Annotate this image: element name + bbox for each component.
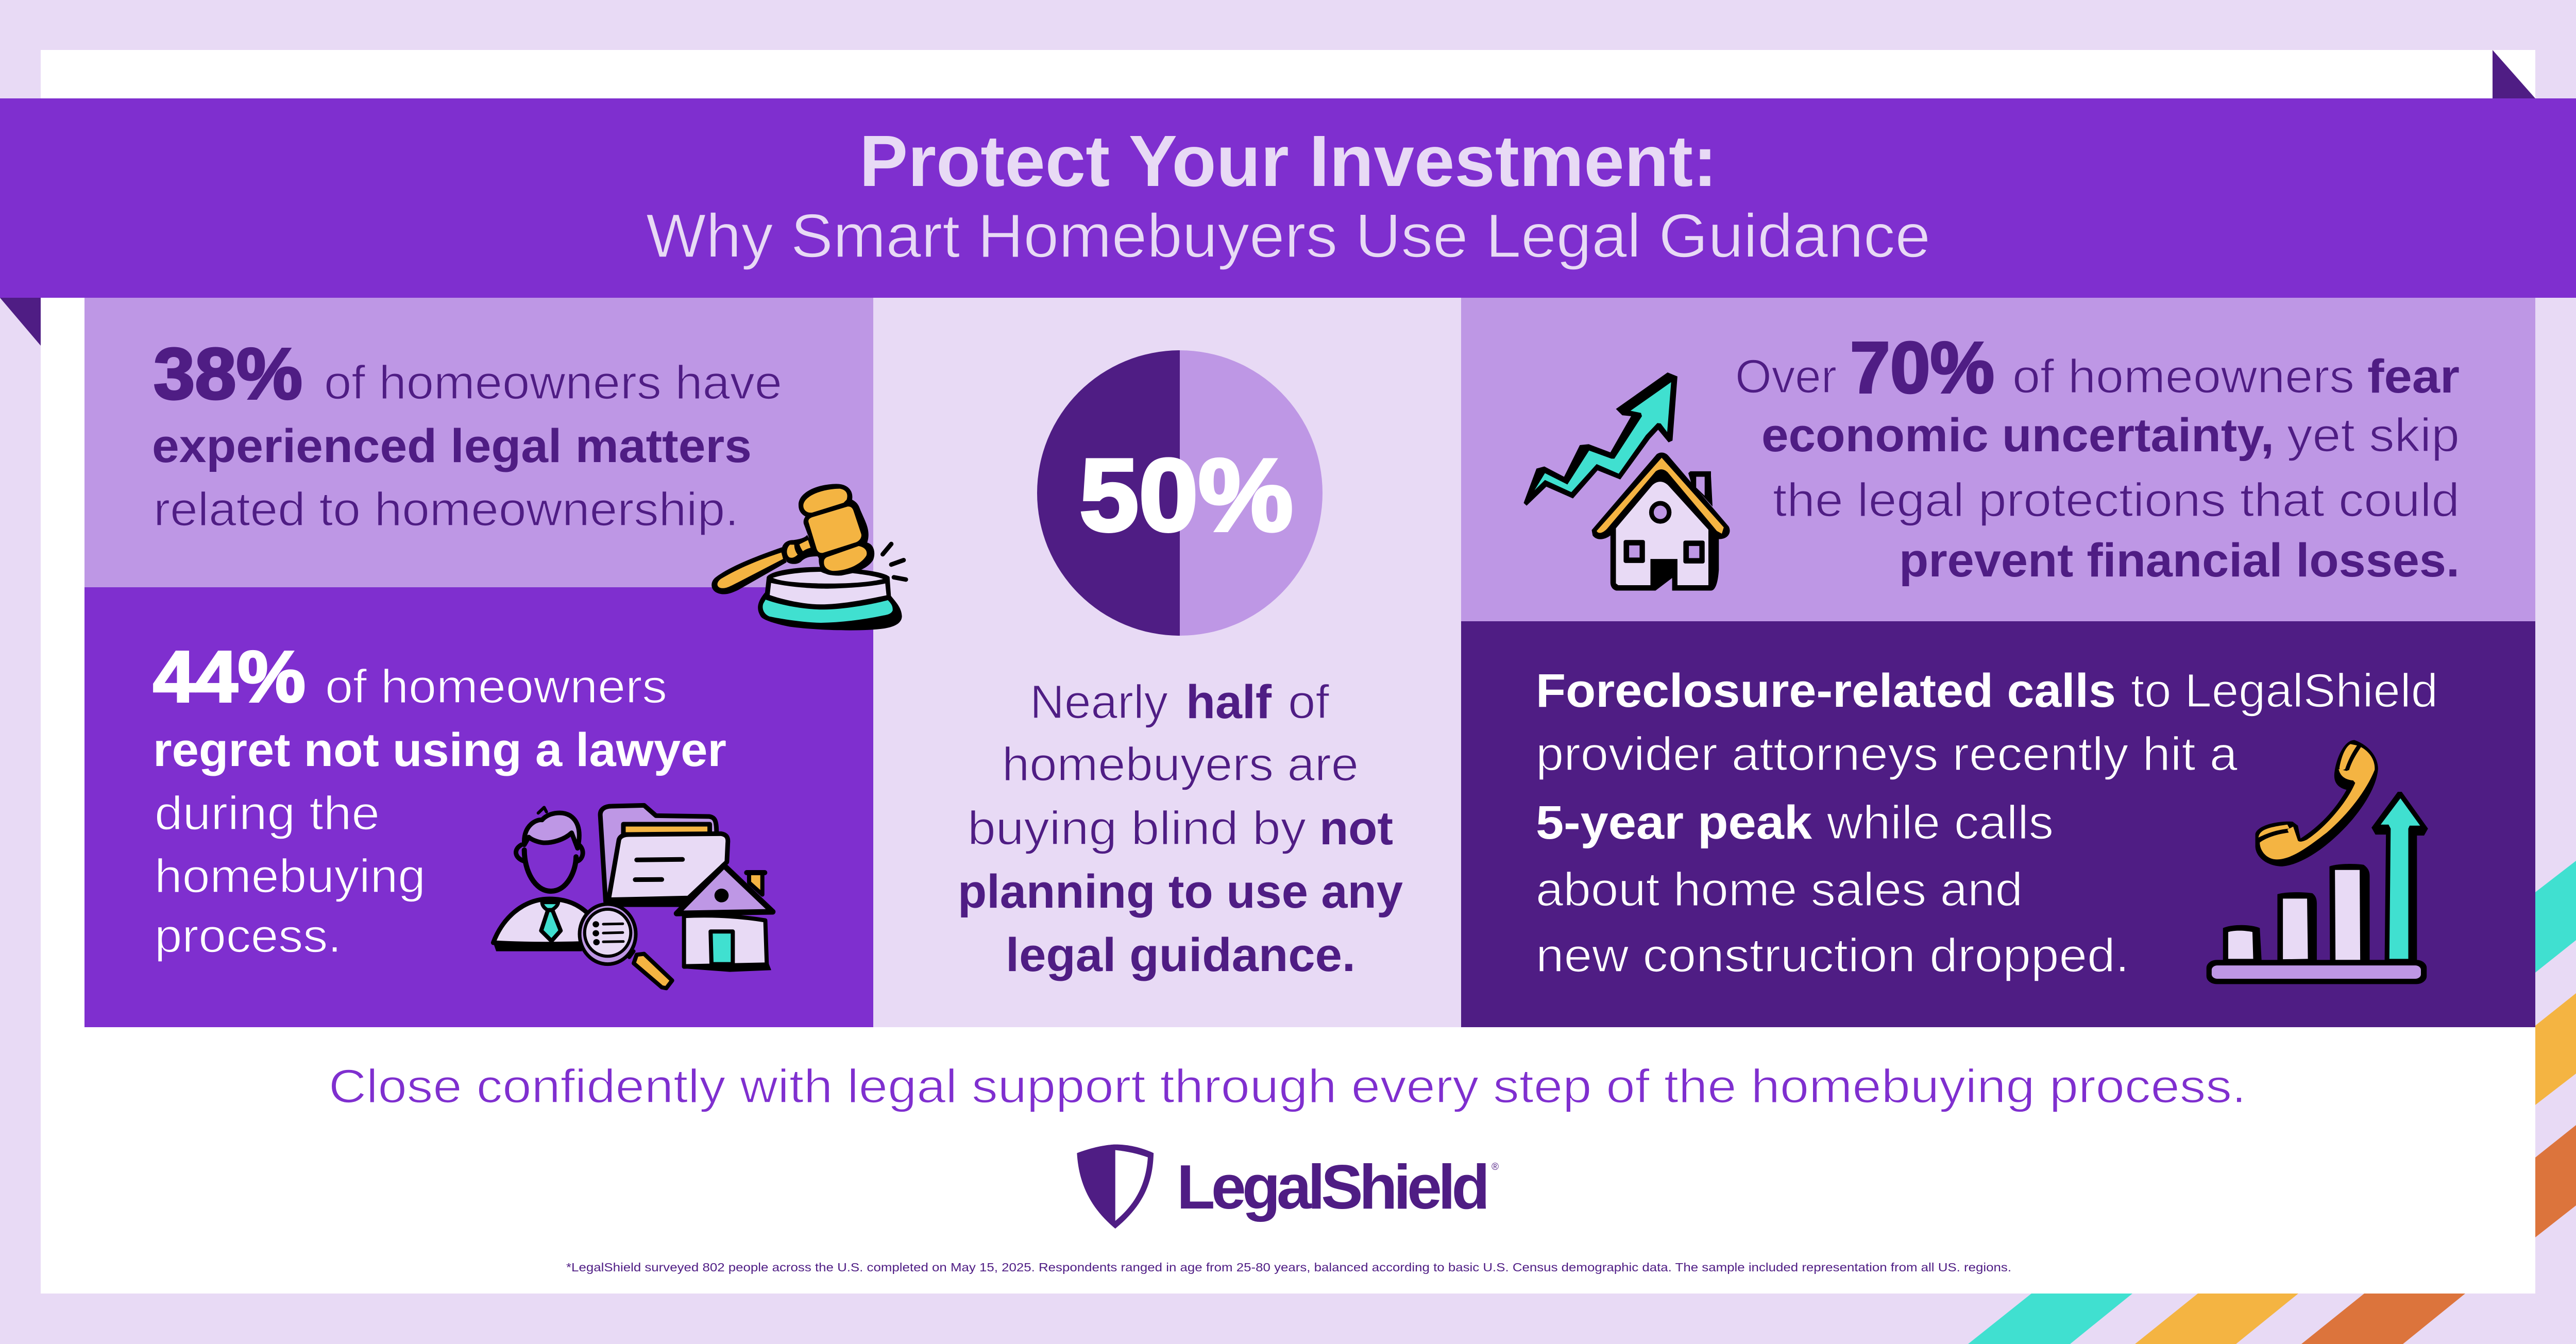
text block: provider attorneys recently hit a	[1536, 728, 2238, 780]
text block: while calls	[1826, 796, 2054, 849]
text block: about home sales and	[1536, 863, 2023, 916]
text block: new construction dropped.	[1536, 929, 2129, 982]
icon: phone and growth chart	[2207, 740, 2428, 984]
chart base	[2207, 960, 2427, 984]
title banner	[0, 98, 2576, 298]
stat 38%: 38%	[154, 333, 302, 414]
rising arrow	[1523, 372, 1677, 506]
text block	[1735, 327, 2460, 587]
text block: fear	[2367, 350, 2460, 403]
text block: half	[1186, 676, 1272, 728]
panel: 70 percent	[1461, 298, 2535, 621]
text block: legal guidance.	[1006, 929, 1355, 981]
call to action: Close confidently with legal support through every step of the homebuying process.	[329, 1060, 2246, 1113]
text line: during the	[155, 787, 380, 840]
banner fold: top right	[2493, 50, 2535, 98]
growth bars	[2223, 864, 2369, 961]
house	[1591, 453, 1730, 591]
bold line: regret not using a lawyer	[153, 724, 726, 776]
text line: of homeowners	[325, 660, 667, 713]
text line: homebuying	[155, 850, 426, 903]
magnifier	[580, 904, 672, 988]
text line: process.	[155, 910, 342, 962]
text block: not	[1319, 802, 1393, 855]
icon: rising arrow over house	[1523, 372, 1730, 591]
text block: economic uncertainty,	[1761, 409, 2274, 462]
text block: buying blind by	[968, 802, 1306, 855]
logo	[1077, 1145, 1499, 1229]
panel: 50 percent	[873, 298, 1461, 1027]
text block	[958, 676, 1403, 981]
panel: 38 percent	[84, 298, 873, 587]
banner fold: bottom left	[0, 298, 41, 346]
text block: planning to use any	[958, 865, 1403, 918]
house	[676, 865, 773, 972]
folder	[600, 805, 728, 907]
bold line: experienced legal matters	[152, 420, 752, 472]
growth arrow	[2371, 792, 2428, 961]
text block: of homeowners	[2012, 350, 2354, 403]
text block	[1536, 665, 2438, 982]
icon: lawyer, folder, magnifier and house	[493, 805, 773, 988]
title: Protect Your Investment:	[859, 120, 1717, 201]
text line: related to homeownership.	[154, 483, 739, 536]
text block: Over	[1735, 350, 1837, 403]
text block: yet skip	[2287, 409, 2460, 462]
subtitle: Why Smart Homebuyers Use Legal Guidance	[646, 201, 1930, 270]
text block: of	[1288, 676, 1329, 728]
decorative corner stripes	[1968, 861, 2576, 1344]
text block: Nearly	[1030, 676, 1168, 728]
footnote: *LegalShield surveyed 802 people across the U.S. completed on May 15, 2025. Respondents ranged in age from 25-80 years, balanced according to basic U.S. Census demographic data. The sample included representation from all US. regions.	[566, 1261, 2011, 1274]
icon: gavel	[711, 484, 906, 631]
lawyer figure	[493, 807, 588, 951]
text block: 5-year peak	[1536, 796, 1812, 849]
text block: Foreclosure-related calls	[1536, 665, 2116, 717]
stat 50%: 50%	[1079, 438, 1293, 553]
wordmark: LegalShield	[1177, 1152, 1490, 1222]
pie chart	[1037, 350, 1323, 636]
phone handset	[2256, 740, 2378, 866]
registered mark: ®	[1492, 1162, 1499, 1172]
text block: 70%	[1850, 327, 1994, 408]
text block: homebuyers are	[1002, 738, 1359, 791]
text line: of homeowners have	[324, 356, 782, 409]
stat 44%: 44%	[153, 636, 306, 717]
panel: 44 percent	[84, 587, 873, 1027]
shield	[1077, 1145, 1154, 1229]
text block: prevent financial losses.	[1899, 534, 2460, 587]
text block: the legal protections that could	[1773, 474, 2460, 526]
panel: foreclosure	[1461, 621, 2535, 1027]
text block: to LegalShield	[2131, 665, 2438, 717]
